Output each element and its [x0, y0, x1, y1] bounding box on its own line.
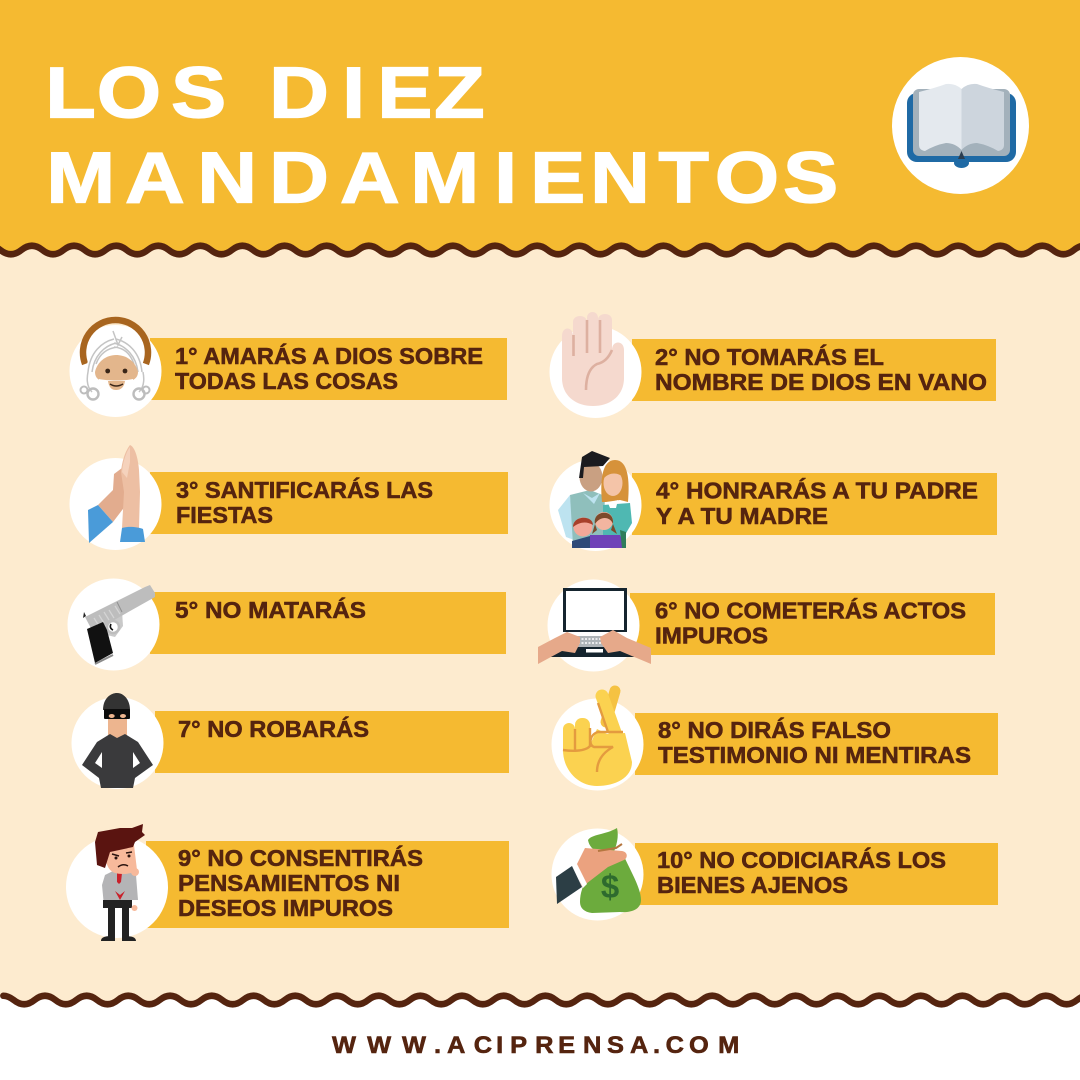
text: commandment 3 [176, 476, 433, 528]
text: commandment 9: 9° NO CONSENTIRÁS [178, 844, 423, 871]
panel: commandment 8 [552, 691, 998, 790]
panel: commandment 2 [550, 312, 996, 418]
icon: family [558, 451, 632, 548]
text: commandment 10: BIENES AJENOS [657, 872, 848, 898]
text: commandment 8: 8° NO DIRÁS FALSO [658, 716, 891, 743]
title: LOS DIEZ [45, 53, 485, 133]
icon: thinking man [95, 824, 145, 941]
footer url: WWW.ACIPRENSA.COM [332, 1033, 739, 1059]
text: commandment 10: 10° NO CODICIARÁS LOS [657, 846, 946, 873]
panel: commandment 3 [70, 445, 508, 550]
text: commandment 9 [178, 844, 423, 921]
text: commandment 5: 5° NO MATARÁS [175, 596, 366, 623]
icon: laptop with hands [538, 588, 651, 664]
icon: thief [82, 693, 153, 788]
text: commandment 2: 2° NO TOMARÁS EL [655, 343, 884, 370]
text: commandment 6: 6° NO COMETERÁS ACTOS [655, 596, 966, 624]
footer band [0, 996, 1080, 1080]
text: commandment 8: TESTIMONIO NI MENTIRAS [658, 742, 971, 768]
text: commandment 3: FIESTAS [176, 502, 273, 528]
text: commandment 6: IMPUROS [655, 622, 768, 648]
text: commandment 4: Y A TU MADRE [656, 503, 828, 529]
text: commandment 9: DESEOS IMPUROS [178, 895, 393, 921]
text: commandment 2 [655, 343, 987, 395]
icon: praying hands [88, 445, 145, 543]
text: commandment 7: 7° NO ROBARÁS [178, 715, 369, 742]
text: commandment 4: 4° HONRARÁS A TU PADRE [656, 476, 978, 504]
panel: commandment 6 [538, 580, 995, 672]
panel: commandment 7 [72, 693, 509, 789]
title [45, 53, 838, 218]
text: commandment 3: 3° SANTIFICARÁS LAS [176, 476, 433, 503]
panel: commandment 10 [552, 828, 998, 920]
panel: commandment 9 [66, 824, 509, 941]
panel: commandment 1 [70, 320, 507, 417]
panel: commandment 5 [68, 578, 506, 670]
text: commandment 10 [657, 846, 946, 898]
text: commandment 9: PENSAMIENTOS NI [178, 870, 400, 896]
title: MANDAMIENTOS [46, 138, 838, 218]
icon: raised hand [562, 312, 624, 406]
text: commandment 2: NOMBRE DE DIOS EN VANO [655, 369, 987, 395]
panel: commandment 4 [550, 451, 997, 551]
text: commandment 6 [655, 596, 966, 648]
icon: hand holding money bag: $ [601, 868, 619, 905]
text: commandment 1: 1° AMARÁS A DIOS SOBRE [175, 342, 483, 369]
icon: God face with halo [80, 320, 150, 405]
header band [0, 0, 1080, 254]
text: commandment 1 [175, 342, 483, 394]
icon: open book [892, 57, 1029, 194]
text: commandment 8 [658, 716, 971, 768]
icon: hand holding money bag [556, 828, 641, 913]
icon: pistol [83, 585, 155, 664]
icon: crossed fingers [563, 691, 632, 786]
text: commandment 1: TODAS LAS COSAS [175, 368, 398, 394]
text: commandment 4 [656, 476, 978, 529]
